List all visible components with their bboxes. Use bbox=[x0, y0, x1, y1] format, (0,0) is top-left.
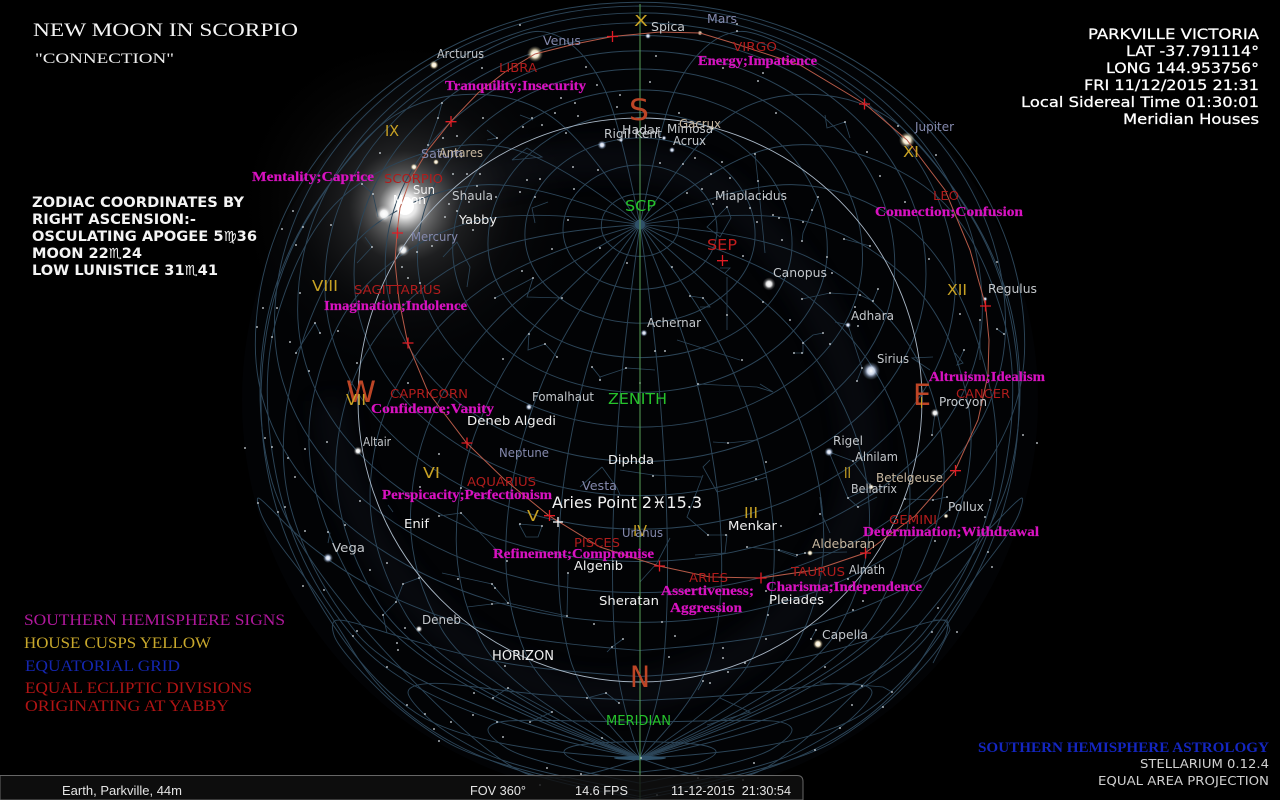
star and planet labels: Regulus bbox=[988, 281, 1037, 296]
house cusp numerals: VI bbox=[423, 464, 440, 482]
title: NEW MOON IN SCORPIO bbox=[33, 20, 298, 41]
house cusp numerals: VIII bbox=[312, 277, 338, 295]
sign virtues and vices bbox=[252, 54, 1045, 616]
star and planet labels: Capella bbox=[822, 627, 868, 642]
star and planet labels: Altair bbox=[363, 434, 392, 449]
reference point labels bbox=[492, 197, 671, 729]
house cusp numerals: II bbox=[844, 464, 851, 482]
zodiac sign names: AQUARIUS bbox=[467, 474, 536, 489]
star and planet labels: Rigel bbox=[833, 433, 863, 448]
zodiac sign names: GEMINI bbox=[889, 512, 937, 527]
star and planet labels: Betelgeuse bbox=[876, 470, 943, 485]
meridian line bbox=[639, 4, 641, 800]
sign virtues and vices: Charisma;Independence bbox=[766, 580, 922, 595]
star and planet labels: Bellatrix bbox=[851, 481, 897, 496]
horizon circle bbox=[358, 118, 922, 682]
star and planet labels: Menkar bbox=[728, 518, 778, 533]
cardinal points: S bbox=[629, 93, 649, 127]
star and planet labels bbox=[332, 11, 1037, 642]
south ecliptic pole marker: SEP bbox=[707, 236, 737, 254]
star and planet labels: Sun bbox=[413, 182, 435, 197]
star and planet labels: Alnilam bbox=[855, 449, 898, 464]
zodiac sign names: LEO bbox=[933, 188, 959, 203]
sign virtues and vices: Energy;Impatience bbox=[698, 54, 817, 69]
zodiac sign names: CANCER bbox=[956, 386, 1010, 401]
credits: SOUTHERN HEMISPHERE ASTROLOGY bbox=[978, 740, 1269, 756]
credits: EQUAL AREA PROJECTION bbox=[1098, 774, 1269, 788]
legend: EQUAL ECLIPTIC DIVISIONS bbox=[25, 680, 252, 697]
location and time block: LONG 144.953756° bbox=[1106, 61, 1259, 77]
star and planet labels: Antares bbox=[439, 145, 483, 160]
star and planet labels: Vega bbox=[332, 540, 365, 555]
house cusp numerals: V bbox=[527, 507, 540, 525]
status bar: Earth, Parkville, 44m bbox=[62, 784, 182, 798]
house cusp numerals: XI bbox=[903, 143, 919, 161]
reference point labels: HORIZON bbox=[492, 649, 554, 664]
zodiac sign names: CAPRICORN bbox=[390, 386, 468, 401]
star and planet labels: Adhara bbox=[851, 308, 894, 323]
star and planet labels: Uranus bbox=[622, 525, 663, 540]
star and planet labels: Deneb bbox=[422, 612, 461, 627]
zodiac sign names bbox=[354, 39, 1010, 585]
zodiac sign names: TAURUS bbox=[790, 564, 845, 579]
star and planet labels: Venus bbox=[543, 33, 581, 48]
legend: ORIGINATING AT YABBY bbox=[25, 698, 229, 715]
reference point labels: SCP bbox=[625, 197, 656, 215]
star and planet labels: Mercury bbox=[411, 229, 459, 244]
zodiac sign names: ARIES bbox=[689, 570, 728, 585]
sky sphere bbox=[242, 2, 1038, 798]
star and planet labels: Pleiades bbox=[769, 592, 824, 607]
star and planet labels: Sheratan bbox=[599, 593, 659, 608]
legend: EQUATORIAL GRID bbox=[25, 658, 180, 675]
house cusp numerals: I bbox=[920, 394, 923, 412]
star and planet labels: Acrux bbox=[673, 133, 706, 148]
legend bbox=[24, 612, 285, 715]
location and time block: PARKVILLE VICTORIA bbox=[1088, 27, 1259, 43]
location and time block bbox=[1021, 27, 1259, 128]
sign virtues and vices: Aggression bbox=[670, 601, 742, 616]
credits bbox=[978, 740, 1269, 788]
reference point labels: MERIDIAN bbox=[606, 714, 671, 729]
star and planet labels: Sirius bbox=[877, 351, 909, 366]
star and planet labels: Achernar bbox=[647, 315, 702, 330]
aries point marker and label: Aries Point 2♓15.3 bbox=[552, 493, 702, 512]
star and planet labels: Algenib bbox=[574, 558, 623, 573]
sign virtues and vices: Determination;Withdrawal bbox=[863, 525, 1039, 540]
location and time block: LAT -37.791114° bbox=[1126, 44, 1259, 60]
zodiac coordinates text block bbox=[32, 195, 257, 279]
zodiac sign names: SCORPIO bbox=[384, 171, 443, 186]
sign virtues and vices: Confidence;Vanity bbox=[371, 402, 494, 417]
house cusp numerals: IX bbox=[385, 122, 399, 140]
status bar: 14.6 FPS bbox=[575, 784, 628, 798]
star and planet labels: Aldebaran bbox=[812, 536, 875, 551]
location and time block: FRI 11/12/2015 21:31 bbox=[1084, 78, 1259, 94]
small stars bbox=[245, 24, 1037, 795]
sign virtues and vices: Mentality;Caprice bbox=[252, 170, 374, 185]
sign virtues and vices: Perspicacity;Perfectionism bbox=[382, 488, 552, 503]
cardinal points: E bbox=[913, 378, 931, 412]
star and planet labels: Neptune bbox=[499, 445, 549, 460]
star and planet labels: Jupiter bbox=[914, 119, 955, 134]
zodiac sign names: PISCES bbox=[574, 535, 620, 550]
zodiac sign names: SAGITTARIUS bbox=[354, 282, 441, 297]
star and planet labels: Fomalhaut bbox=[532, 389, 594, 404]
sign virtues and vices: Connection;Confusion bbox=[875, 205, 1023, 220]
star and planet labels: Hadar bbox=[622, 122, 661, 137]
star and planet labels: Moon bbox=[393, 192, 426, 207]
zodiac coordinates text block: OSCULATING APOGEE 5♍36 bbox=[32, 229, 257, 245]
sign virtues and vices: Altruism;Idealism bbox=[929, 370, 1045, 385]
house cusp numerals bbox=[312, 12, 967, 540]
star and planet labels: Mimosa bbox=[667, 121, 713, 136]
star and planet labels: Canopus bbox=[773, 265, 827, 280]
sign virtues and vices: Tranquility;Insecurity bbox=[445, 79, 586, 94]
star and planet labels: Deneb Algedi bbox=[467, 413, 556, 428]
cardinal points: W bbox=[346, 375, 376, 409]
zodiac coordinates text block: ZODIAC COORDINATES BY bbox=[32, 195, 245, 211]
bright stars and planets bbox=[323, 30, 988, 649]
star and planet labels: Yabby bbox=[458, 212, 498, 227]
star and planet labels: Pollux bbox=[948, 499, 984, 514]
star and planet labels: Gacrux bbox=[679, 116, 721, 131]
aries point marker and label bbox=[552, 493, 702, 527]
south ecliptic pole marker bbox=[707, 236, 737, 266]
house cusp numerals: XII bbox=[947, 281, 967, 299]
star and planet labels: Spica bbox=[651, 19, 685, 34]
star and planet labels: Saturn bbox=[421, 146, 463, 161]
star and planet labels: Mars bbox=[707, 11, 737, 26]
legend: HOUSE CUSPS YELLOW bbox=[24, 635, 212, 652]
milky way band bbox=[330, 160, 861, 695]
zodiac sign names: VIRGO bbox=[733, 39, 777, 54]
star and planet labels: Shaula bbox=[452, 188, 493, 203]
star and planet labels: Arcturus bbox=[437, 46, 484, 61]
house cusp numerals: VII bbox=[346, 391, 366, 409]
status bar bbox=[0, 776, 803, 800]
ecliptic with equal divisions bbox=[392, 31, 991, 584]
sign virtues and vices: Refinement;Compromise bbox=[493, 547, 654, 562]
zodiac coordinates text block: MOON 22♏24 bbox=[32, 246, 142, 262]
cardinal points bbox=[346, 93, 931, 694]
star and planet labels: Miaplacidus bbox=[715, 188, 787, 203]
location and time block: Local Sidereal Time 01:30:01 bbox=[1021, 95, 1259, 111]
house cusp numerals: IV bbox=[633, 522, 648, 540]
reference point labels: ZENITH bbox=[608, 390, 667, 408]
house cusp numerals: X bbox=[634, 12, 648, 30]
cardinal points: N bbox=[630, 660, 650, 694]
constellation lines bbox=[296, 103, 1004, 725]
title: "CONNECTION" bbox=[35, 51, 174, 67]
credits: STELLARIUM 0.12.4 bbox=[1140, 757, 1269, 771]
sun glare bbox=[240, 41, 570, 371]
star and planet labels: Vesta bbox=[582, 478, 617, 493]
zodiac sign names: LIBRA bbox=[499, 60, 537, 75]
sign virtues and vices: Assertiveness; bbox=[661, 584, 754, 599]
star and planet labels: Diphda bbox=[608, 452, 654, 467]
zodiac coordinates text block: RIGHT ASCENSION:- bbox=[32, 212, 196, 228]
star and planet labels: Alnath bbox=[849, 562, 885, 577]
title bbox=[33, 20, 298, 67]
zodiac coordinates text block: LOW LUNISTICE 31♏41 bbox=[32, 263, 218, 279]
equatorial grid bbox=[255, 2, 1025, 799]
legend: SOUTHERN HEMISPHERE SIGNS bbox=[24, 612, 285, 629]
location and time block: Meridian Houses bbox=[1123, 112, 1259, 128]
status bar: FOV 360° bbox=[470, 784, 526, 798]
star and planet labels: Enif bbox=[404, 516, 430, 531]
house cusp numerals: III bbox=[744, 504, 758, 522]
status bar: 11-12-2015 21:30:54 bbox=[671, 784, 791, 798]
sign virtues and vices: Imagination;Indolence bbox=[324, 299, 467, 314]
star and planet labels: Rigil Kent bbox=[604, 126, 662, 141]
star and planet labels: Procyon bbox=[939, 394, 987, 409]
